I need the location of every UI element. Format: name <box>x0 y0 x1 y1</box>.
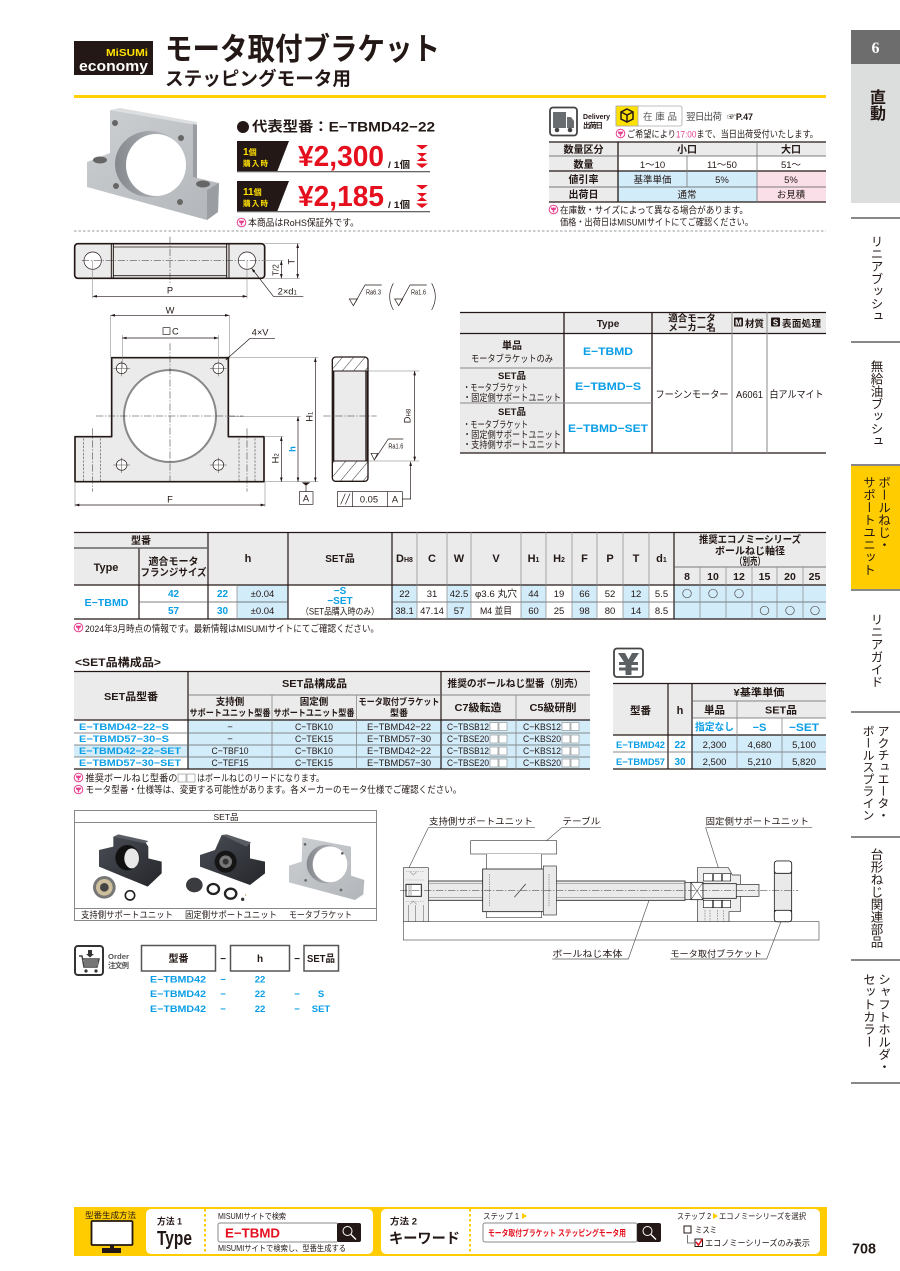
type and material table: A6061 <box>736 390 763 401</box>
dimensions table: ±0.04 <box>251 606 274 617</box>
icon: monitor <box>92 1221 132 1253</box>
SET components notes: 推奨ボールねじ型番の <box>86 772 178 784</box>
dimensions table: H1 <box>528 553 540 565</box>
dimensions table: 42 <box>168 589 179 600</box>
price row: 1 piece: 1個 <box>243 147 257 158</box>
base plate <box>403 922 819 940</box>
base price table: 単品 <box>704 704 725 716</box>
front view: F <box>167 495 173 505</box>
order example: 22 <box>255 989 265 1000</box>
order example: − <box>220 989 226 1000</box>
side section view: A <box>392 495 399 505</box>
order example: 22 <box>255 1004 265 1015</box>
price row: 1 piece: / 1個 <box>388 159 410 171</box>
footer: part number search bar: 方法 1 <box>157 1216 182 1226</box>
dimensions table: 57 <box>454 606 464 617</box>
side section view: Ra1.6 <box>388 441 403 450</box>
fixed-side unit <box>685 868 759 922</box>
dimensions table: 適合モータ <box>148 555 198 568</box>
quantity discount table: 大口 <box>781 143 801 156</box>
tab: chapter 6 <box>851 30 900 64</box>
type and material table: フーシンモーター <box>656 389 728 401</box>
type and material table: 白アルマイト <box>770 388 824 401</box>
SET components table: サポートユニット型番 <box>190 707 270 718</box>
support-side unit <box>403 868 428 922</box>
order example: 型番 <box>168 952 188 965</box>
dimensions table: 12 <box>631 589 641 600</box>
dimensions table: W <box>454 553 465 565</box>
price row: 1 piece <box>237 141 430 173</box>
tab: chapter 6: 6 <box>872 40 880 57</box>
base price table: 22 <box>674 740 686 751</box>
SET components table: C−TEK15 <box>295 758 333 769</box>
base price table: SET品 <box>765 704 797 716</box>
title: モータ取付ブラケット <box>165 32 440 67</box>
dimensions table: C <box>428 553 436 565</box>
surface roughness marks <box>349 283 435 310</box>
dimensions table: 型番 <box>131 534 151 547</box>
dimensions table: 98 <box>579 606 590 617</box>
motor bracket <box>774 861 792 922</box>
SET components table: E−TBMD42−22−SET <box>79 746 181 757</box>
order example: − <box>294 1004 300 1015</box>
tab: ball screw support units (active): ボールねじ・ <box>876 476 890 551</box>
icon: search button <box>337 1223 361 1242</box>
logo: MiSUMi economy: economy <box>79 59 148 75</box>
quantity discount table: 数量区分 <box>564 143 604 156</box>
dimensions table: 8.5 <box>655 606 668 617</box>
footer: part number search bar: ミスミ <box>695 1225 717 1235</box>
SET components table: SET品型番 <box>104 690 159 703</box>
delivery notes: 価格・出荷日はMISUMIサイトにてご確認ください。 <box>560 216 753 228</box>
quantity discount table: 基準単価 <box>633 174 672 186</box>
technical drawing: bracket dimensions <box>75 237 435 507</box>
footer: part number search bar: Type <box>157 1228 192 1250</box>
SET components table: C−TBK10 <box>295 722 333 733</box>
ball screw assembly diagram: 固定側サポートユニット <box>706 815 809 826</box>
tab: linear guide: リニアガイド <box>868 613 882 688</box>
dimensions table: 47.14 <box>420 606 444 617</box>
tab: actuators <box>861 725 890 821</box>
top view <box>75 237 303 298</box>
quantity discount table: 値引率 <box>568 173 598 186</box>
type and material table: ・固定側サポートユニット <box>463 429 561 441</box>
dimensions table: 12 <box>733 571 745 583</box>
ball screw assembly diagram: 支持側サポートユニット <box>429 815 533 826</box>
type and material table: ・固定側サポートユニット <box>463 392 561 404</box>
SET components table: E−TBMD57−30−SET <box>79 758 181 769</box>
SET components table: C−TBSE20 <box>447 734 489 745</box>
delivery panel: ご希望により17:00まで、当日出荷受付いたします。 <box>627 128 818 140</box>
order example <box>75 946 338 1015</box>
order example: S <box>318 989 324 1000</box>
dimensions table: Type <box>94 562 118 574</box>
dimensions table: （SET品購入時のみ） <box>301 606 379 616</box>
SET components table: C−KBS20 <box>523 758 561 769</box>
type and material table: SET品 <box>498 407 526 418</box>
dimensions table: SET品 <box>325 553 355 565</box>
SET components table: C−TEK15 <box>295 734 333 745</box>
front view <box>75 306 318 507</box>
tab: linear bushing: リニアブッシュ <box>868 235 882 322</box>
base price table: E−TBMD42 <box>616 740 665 751</box>
SET components table: E−TBMD57−30 <box>367 758 431 769</box>
dimensions table: 22 <box>217 589 228 600</box>
dimensions table: M4 並目 <box>480 605 512 617</box>
stock badge: 在 庫 品 <box>643 111 677 123</box>
dimensions table: 22 <box>399 589 410 600</box>
order example: E−TBMD42 <box>150 989 206 1000</box>
dimensions table: 31 <box>427 589 437 600</box>
SET components table: C−TEF15 <box>212 758 248 769</box>
quantity discount table: 小口 <box>677 143 697 156</box>
dimensions table: 30 <box>217 606 228 617</box>
front view: C <box>172 327 179 337</box>
SET components table: E−TBMD42−22−S <box>79 722 169 733</box>
delivery panel <box>550 106 818 140</box>
tab: linear motion: 直動 <box>867 88 886 122</box>
base price table <box>613 683 826 769</box>
delivery panel: 翌日出荷 <box>686 111 722 123</box>
front view: H2 <box>270 453 280 463</box>
side section view <box>323 357 419 507</box>
dimensions table: 66 <box>579 589 590 600</box>
SET components table: C−TBK10 <box>295 746 333 757</box>
side section view: 0.05 <box>360 495 378 505</box>
dimensions table: P <box>606 553 614 565</box>
front view: W <box>166 306 175 316</box>
SET components table: C−KBS12 <box>523 746 561 757</box>
order example: − <box>220 974 226 986</box>
front view: H1 <box>304 411 314 422</box>
order example: − <box>294 989 300 1000</box>
type and material table: E−TBMD <box>583 346 633 358</box>
type and material table: E−TBMD−SET <box>568 423 648 435</box>
base price table: E−TBMD57 <box>616 757 665 768</box>
yen price icon <box>614 648 643 677</box>
order example: − <box>220 1004 226 1015</box>
base price table: h <box>677 705 684 717</box>
SET components table: SET品構成品 <box>282 677 347 690</box>
icon: shopping cart <box>75 946 103 975</box>
quantity discount table: 通常 <box>677 189 697 201</box>
SET product photo panel: 固定側サポートユニット <box>185 909 277 920</box>
SET components table: E−TBMD57−30−S <box>79 734 169 745</box>
SET components table: − <box>227 722 233 733</box>
quantity discount table <box>549 142 826 202</box>
base price table: 4,680 <box>748 740 771 751</box>
type and material table: 単品 <box>502 339 522 352</box>
sidebar navigation <box>851 30 900 1084</box>
SET components table: E−TBMD42−22 <box>367 746 431 757</box>
dimensions table: −SET <box>327 596 353 607</box>
fixed-side unit photo <box>186 834 265 901</box>
subtitle: ステッピングモータ用 <box>165 67 351 90</box>
type and material table: SET品 <box>498 371 526 382</box>
tab: shaft holders <box>861 973 890 1073</box>
base price table: 5,100 <box>792 740 816 751</box>
stock badge <box>616 106 682 126</box>
footer: part number search bar: エコノミーシリーズを選択 <box>719 1211 806 1221</box>
tab: ball screw support units (active) <box>851 466 900 589</box>
dimensions table: φ3.6 丸穴 <box>475 588 518 600</box>
SET components table: C7級転造 <box>454 701 502 714</box>
top view: T <box>287 259 297 265</box>
icon: delivery truck <box>550 108 577 136</box>
footer: part number search bar: ステップ 2 <box>677 1212 711 1221</box>
dimensions table: 5.5 <box>655 589 668 600</box>
dimensions table: 38.1 <box>395 606 414 617</box>
price row: 1 piece: 購入時 <box>243 158 268 168</box>
base price table: 2,300 <box>703 740 726 751</box>
type and material table: Type <box>597 319 620 330</box>
type and material table: ・支持側サポートユニット <box>463 439 561 451</box>
SET components table: C−KBS12 <box>523 722 561 733</box>
logo: MiSUMi economy <box>74 41 153 75</box>
SET components table: C−TBSB12 <box>447 722 489 733</box>
dimensions table: 14 <box>631 606 641 617</box>
order example: 注文例 <box>108 960 130 970</box>
base price table: 5,820 <box>792 757 816 768</box>
order example: − <box>294 954 300 965</box>
type and material table <box>460 312 826 453</box>
front view: h <box>287 446 297 452</box>
SET components table: モータ取付ブラケット <box>358 696 440 707</box>
base price table: ¥基準単価 <box>734 686 784 699</box>
SET components table: − <box>227 734 233 745</box>
type and material table: モータブラケットのみ <box>471 353 553 365</box>
motor bracket photo <box>289 837 364 900</box>
ball screw shaft <box>428 881 685 900</box>
type and material table: ・モータブラケット <box>463 419 528 431</box>
delivery notes <box>549 204 753 228</box>
dimensions table: 20 <box>784 571 796 583</box>
SET components table: 型番 <box>390 707 408 718</box>
quantity discount table: 5% <box>784 175 798 186</box>
order example: h <box>257 954 263 965</box>
dimensions table: 10 <box>707 571 719 583</box>
top view: 2×d1 <box>278 286 297 296</box>
base price table: 2,500 <box>703 757 726 768</box>
SET components table: E−TBMD57−30 <box>367 734 431 745</box>
table <box>471 841 557 918</box>
SET product photo panel: 支持側サポートユニット <box>81 909 173 920</box>
SET components table <box>74 671 590 769</box>
icon: search button 2 <box>637 1223 661 1242</box>
type and material table: メーカー名 <box>668 322 716 334</box>
dimensions table: H2 <box>553 553 565 565</box>
base price table: 型番 <box>630 704 651 717</box>
RoHS note: 本商品はRoHS保証外です。 <box>248 217 359 229</box>
quantity discount table: 1〜10 <box>640 160 665 171</box>
SET product photo panel: SET品 <box>213 812 239 822</box>
surface roughness marks: Ra1.6 <box>411 287 426 296</box>
product photo: bracket <box>87 108 219 220</box>
order example: Order <box>108 952 129 961</box>
dimensions table: F <box>581 553 588 565</box>
order example: − <box>220 954 226 965</box>
delivery panel: Delivery <box>583 112 611 121</box>
SET components table: C−TBSE20 <box>447 758 489 769</box>
footer: part number search bar: ステップ 1 <box>483 1212 520 1221</box>
order example: 22 <box>255 974 265 986</box>
base price table: 指定なし <box>695 720 734 734</box>
type and material table: 適合モータ <box>668 312 716 324</box>
type and material table: S <box>773 318 779 328</box>
base price table: −S <box>753 722 766 734</box>
ball screw assembly diagram: モータ取付ブラケット <box>670 948 762 959</box>
ball screw assembly diagram <box>400 815 819 959</box>
dimensions table: ±0.04 <box>251 589 274 600</box>
delivery notes: 在庫数・サイズによって異なる場合があります。 <box>560 204 748 216</box>
type and material table: E−TBMD−S <box>575 381 641 393</box>
price row: 1 piece: ¥2,300 <box>298 141 384 173</box>
tab: shaft holders: シャフトホルダ・ <box>876 973 890 1073</box>
dimensions table: 19 <box>554 589 564 600</box>
SET product photo panel: モータブラケット <box>289 909 352 920</box>
SET components notes: モータ型番・仕様等は、変更する可能性があります。各メーカーのモータ仕様でご確認ください。 <box>86 784 462 796</box>
dimensions table: 8 <box>684 571 690 583</box>
dimensions table: （別売） <box>735 555 765 568</box>
dimensions table: 44 <box>528 589 539 600</box>
quantity discount table: お見積 <box>777 189 806 201</box>
front view: A <box>303 494 310 504</box>
SET components table: C5級研削 <box>530 701 576 714</box>
delivery panel: 出荷日 <box>583 120 603 130</box>
dimensions table: T <box>633 553 640 565</box>
dimensions note: 2024年3月時点の情報です。最新情報はMISUMIサイトにてご確認ください。 <box>85 623 379 635</box>
quantity discount table: 11〜50 <box>707 160 737 171</box>
support-side unit photo <box>93 834 162 900</box>
footer: part number search bar: E−TBMD <box>225 1226 280 1240</box>
quantity discount table: 5% <box>715 175 729 186</box>
side section view: DH8 <box>403 408 413 423</box>
quantity discount table: 数量 <box>574 158 594 171</box>
type and material table: M <box>735 318 742 328</box>
delivery panel: ☞P.47 <box>727 112 753 123</box>
tab: shaft holders: セットカラー <box>861 973 875 1048</box>
dimensions table: −S <box>334 586 347 597</box>
order example: SET品 <box>307 953 335 965</box>
tab: linear motion <box>851 64 900 203</box>
ball screw assembly diagram: ボールねじ本体 <box>552 948 622 959</box>
dimensions table: 60 <box>528 606 539 617</box>
SET components table: C−TBSB12 <box>447 746 489 757</box>
SET components notes: はボールねじのリードになります。 <box>197 774 324 784</box>
top view: T/2 <box>271 264 280 276</box>
representative part number: 代表型番：E−TBMD42−22 <box>252 118 435 134</box>
dimensions table: DH8 <box>396 553 413 565</box>
SET product photo panel <box>74 810 377 920</box>
top view: P <box>167 286 173 296</box>
footer: part number search bar: MISUMIサイトで検索し、型番生成する <box>218 1243 346 1253</box>
dimensions table: V <box>492 553 500 565</box>
dimensions table: h <box>245 553 252 565</box>
tab: trapezoidal screw parts: 台形ねじ関連部品 <box>868 847 883 948</box>
tab: actuators: アクチュエータ・ <box>876 725 890 821</box>
SET components heading: <SET品構成品> <box>75 655 161 669</box>
dimensions table: 57 <box>168 606 179 617</box>
base price table: 30 <box>674 757 686 768</box>
price row: 11 pieces: / 1個 <box>388 199 410 211</box>
dimensions table: d1 <box>656 553 667 565</box>
footer: part number search bar: 型番生成方法 <box>85 1210 136 1220</box>
ball screw assembly diagram: テーブル <box>562 815 600 826</box>
order example: E−TBMD42 <box>150 974 206 986</box>
SET components table: 推奨のボールねじ型番（別売） <box>448 677 584 690</box>
price row: 11 pieces: 11個 <box>243 187 262 198</box>
order example: SET <box>312 1004 330 1015</box>
type and material table: 材質 <box>745 318 764 330</box>
type and material table: 表面処理 <box>782 318 821 330</box>
tab: actuators: ボールスプライン <box>861 725 875 821</box>
dimensions table: フランジサイズ <box>140 566 206 579</box>
base price table: 5,210 <box>748 757 771 768</box>
footer: part number search bar: エコノミーシリーズのみ表示 <box>705 1238 810 1248</box>
base price table: −SET <box>789 722 819 734</box>
dimensions table: 80 <box>605 606 615 617</box>
footer: part number search bar <box>74 1207 827 1256</box>
dimensions table <box>74 532 826 619</box>
price row: 11 pieces <box>237 181 430 213</box>
SET components table: C−KBS20 <box>523 734 561 745</box>
dimensions table: 52 <box>605 589 615 600</box>
dimensions table: 42.5 <box>450 589 468 600</box>
SET components table: 支持側 <box>216 696 244 708</box>
SET components notes <box>74 772 461 796</box>
dimensions table: E−TBMD <box>84 598 128 609</box>
logo: MiSUMi economy: MiSUMi <box>106 47 148 59</box>
quantity discount table: 出荷日 <box>568 188 598 201</box>
quantity discount table: 51〜 <box>781 160 802 171</box>
SET components table: C−TBF10 <box>212 746 248 757</box>
SET components table: E−TBMD42−22 <box>367 722 431 733</box>
SET components table: 固定側 <box>300 696 328 708</box>
footer: part number search bar: キーワード <box>389 1232 460 1248</box>
SET components table: サポートユニット型番 <box>274 707 354 718</box>
dimensions table: ボールねじ軸径 <box>715 544 785 558</box>
callout labels <box>409 828 812 959</box>
dimensions table: 15 <box>759 571 770 583</box>
footer: part number search bar: 方法 2 <box>390 1216 417 1226</box>
type and material table: ・モータブラケット <box>463 382 528 394</box>
page number: 708 <box>852 1240 876 1258</box>
tab: ball screw support units (active): サポートユニット <box>861 476 875 576</box>
price row: 11 pieces: 購入時 <box>243 198 268 208</box>
dimensions table: 25 <box>809 571 820 583</box>
order example: E−TBMD42 <box>150 1004 206 1015</box>
header rule <box>74 95 826 98</box>
front view: 4×V <box>252 328 269 338</box>
surface roughness marks: Ra6.3 <box>366 287 381 296</box>
footer: part number search bar: モータ取付ブラケット ステッピングモータ用 <box>488 1228 626 1238</box>
dimensions table: 推奨エコノミーシリーズ <box>699 533 801 546</box>
ball nut <box>483 866 556 915</box>
footer: part number search bar: MISUMIサイトで検索 <box>218 1211 286 1221</box>
tab: oil-free bushing: 無給油ブッシュ <box>868 359 883 448</box>
price row: 11 pieces: ¥2,185 <box>298 181 384 213</box>
dimensions table: 25 <box>554 606 564 617</box>
